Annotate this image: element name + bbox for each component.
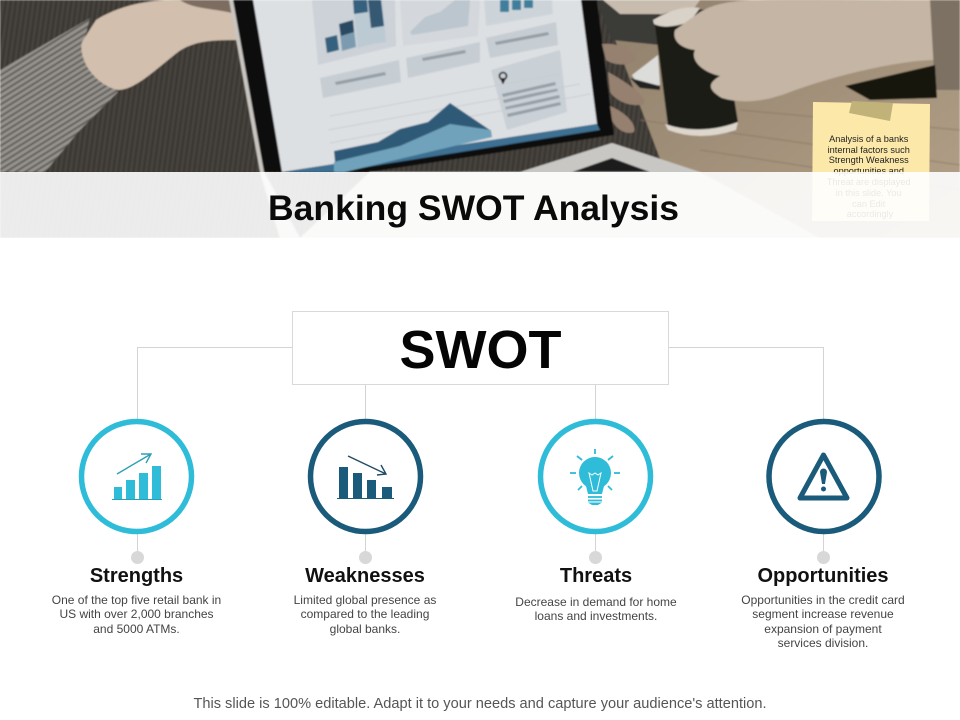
weaknesses text: global banks. xyxy=(330,622,400,636)
opportunities dot xyxy=(817,551,830,564)
translucent title band xyxy=(0,172,960,238)
opportunities text xyxy=(741,565,905,650)
strengths text: One of the top five retail bank in xyxy=(52,593,221,607)
strengths text xyxy=(52,565,221,636)
weaknesses text: Weaknesses xyxy=(305,565,425,587)
sticky note: accordingly xyxy=(847,209,894,219)
strengths dot xyxy=(131,551,144,564)
weaknesses dot xyxy=(359,551,372,564)
weaknesses icon xyxy=(308,418,424,534)
strengths text: Strengths xyxy=(90,565,183,587)
threats icon xyxy=(538,418,654,534)
title: Banking SWOT Analysis xyxy=(268,188,679,228)
weaknesses text: compared to the leading xyxy=(301,607,429,621)
footer note: This slide is 100% editable. Adapt it to your needs and capture your audience's attention. xyxy=(193,696,767,712)
sticky note: can Edit xyxy=(852,199,886,209)
charts on screen xyxy=(312,0,396,65)
strengths text: US with over 2,000 branches xyxy=(59,607,214,621)
sticky note: Analysis of a banks xyxy=(829,134,909,144)
sticky note: internal factors such xyxy=(828,145,910,155)
threats text: Decrease in demand for home xyxy=(515,595,677,609)
threats text: Threats xyxy=(560,565,632,587)
opportunities text: Opportunities xyxy=(757,565,889,587)
sticky note: opportunities and xyxy=(833,166,904,176)
threats dot xyxy=(589,551,602,564)
header photo: laptop with charts, hands and coffee cup xyxy=(0,0,960,238)
threats text: loans and investments. xyxy=(535,609,657,623)
opportunities icon xyxy=(766,418,882,534)
strengths text: and 5000 ATMs. xyxy=(93,622,180,636)
opportunities text: Opportunities in the credit card xyxy=(741,593,905,607)
sticky note: Strength Weakness xyxy=(829,155,909,165)
opportunities text: services division. xyxy=(778,636,868,650)
threats text xyxy=(515,565,677,623)
opportunities text: segment increase revenue xyxy=(752,607,894,621)
opportunities text: expansion of payment xyxy=(764,622,882,636)
strengths icon xyxy=(78,418,194,534)
SWOT heading box xyxy=(292,311,669,385)
right hand and cup xyxy=(603,0,700,14)
sticky note: Threat are displayed xyxy=(827,177,911,187)
sticky note: in this slide. You xyxy=(836,188,902,198)
weaknesses text xyxy=(294,565,436,636)
SWOT heading box: SWOT xyxy=(400,320,561,380)
weaknesses text: Limited global presence as xyxy=(294,593,436,607)
sticky note xyxy=(812,101,930,221)
